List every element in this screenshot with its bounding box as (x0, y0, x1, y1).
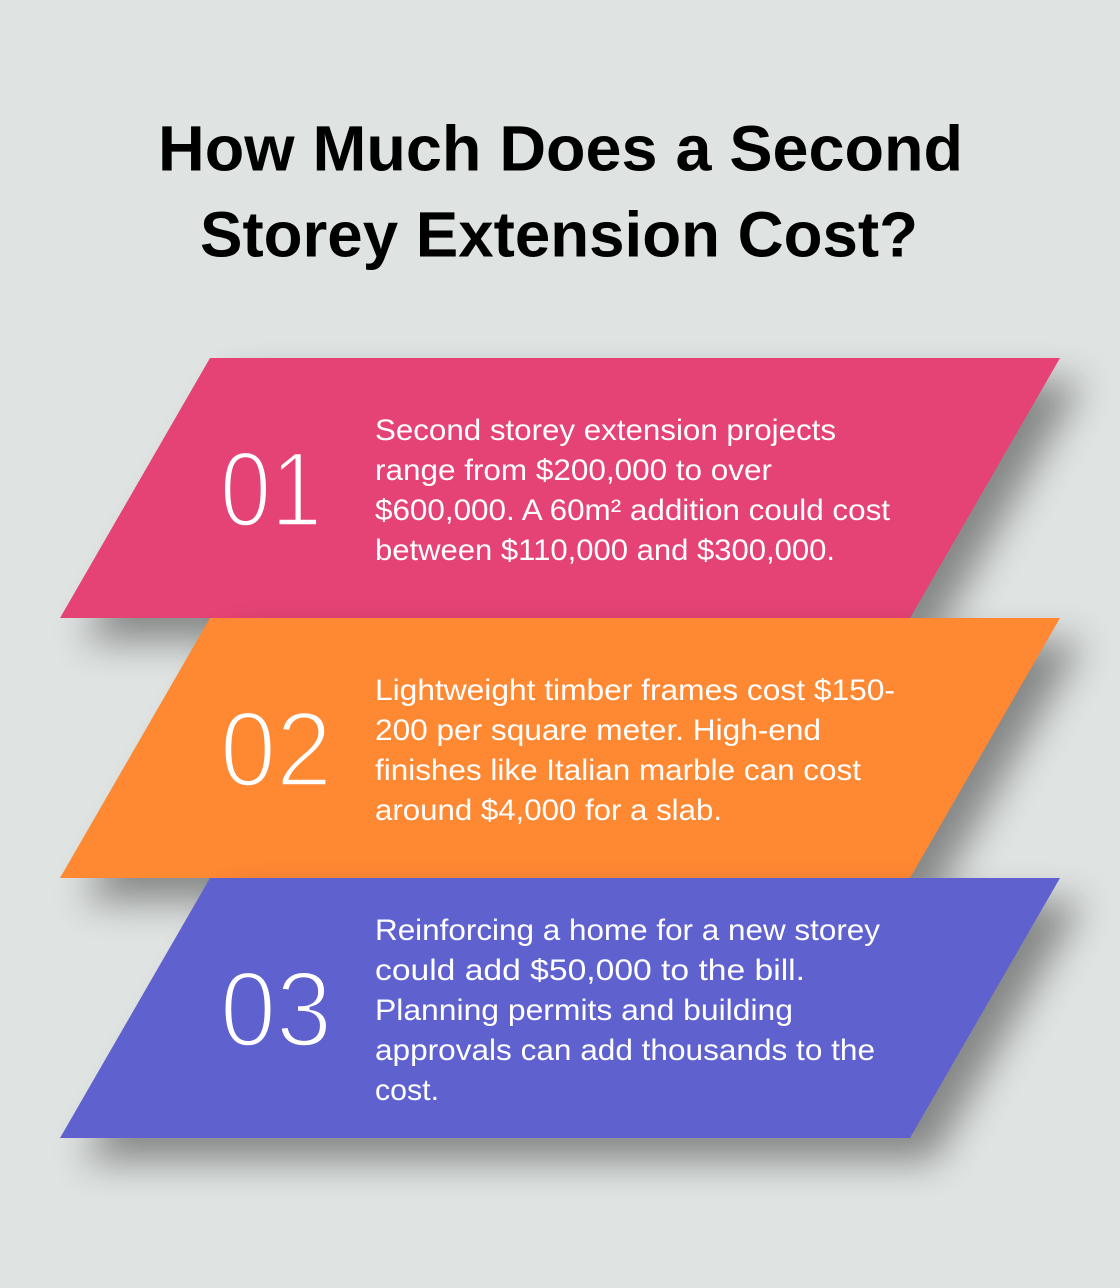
text: step 02 description (375, 674, 895, 827)
text: step 02 description: finishes like Italian marble can cost (375, 754, 862, 787)
title (158, 112, 963, 270)
text: step 01 description: $600,000. A 60m² addition could cost (375, 494, 891, 527)
number 02: 02 (220, 689, 332, 809)
panel: step 03 (60, 878, 1083, 1161)
text: step 01 description (375, 414, 891, 567)
text: step 03 description: Planning permits and building (375, 994, 793, 1027)
band: purple parallelogram (60, 878, 1060, 1138)
number 03: 03 (220, 949, 332, 1069)
text: step 01 description: Second storey extension projects (375, 414, 836, 447)
number 01: 01 (220, 429, 322, 549)
text: step 01 description: range from $200,000 to over (375, 454, 772, 487)
text: step 03 description: could add $50,000 to the bill. (375, 954, 805, 987)
title: How Much Does a Second (158, 112, 963, 184)
text: step 03 description: Reinforcing a home for a new storey (375, 914, 880, 947)
text: step 02 description: 200 per square meter. High-end (375, 714, 821, 747)
text: step 02 description: Lightweight timber frames cost $150- (375, 674, 895, 707)
text: step 03 description (375, 914, 880, 1107)
band: pink parallelogram (60, 358, 1060, 618)
text: step 03 description: cost. (375, 1074, 439, 1107)
panel: step 02 (60, 618, 1083, 901)
title: Storey Extension Cost? (200, 198, 918, 270)
panel: step 01 (60, 358, 1083, 641)
text: step 02 description: around $4,000 for a slab. (375, 794, 722, 827)
text: step 03 description: approvals can add thousands to the (375, 1034, 875, 1067)
text: step 01 description: between $110,000 and $300,000. (375, 534, 835, 567)
band: orange parallelogram (60, 618, 1060, 878)
